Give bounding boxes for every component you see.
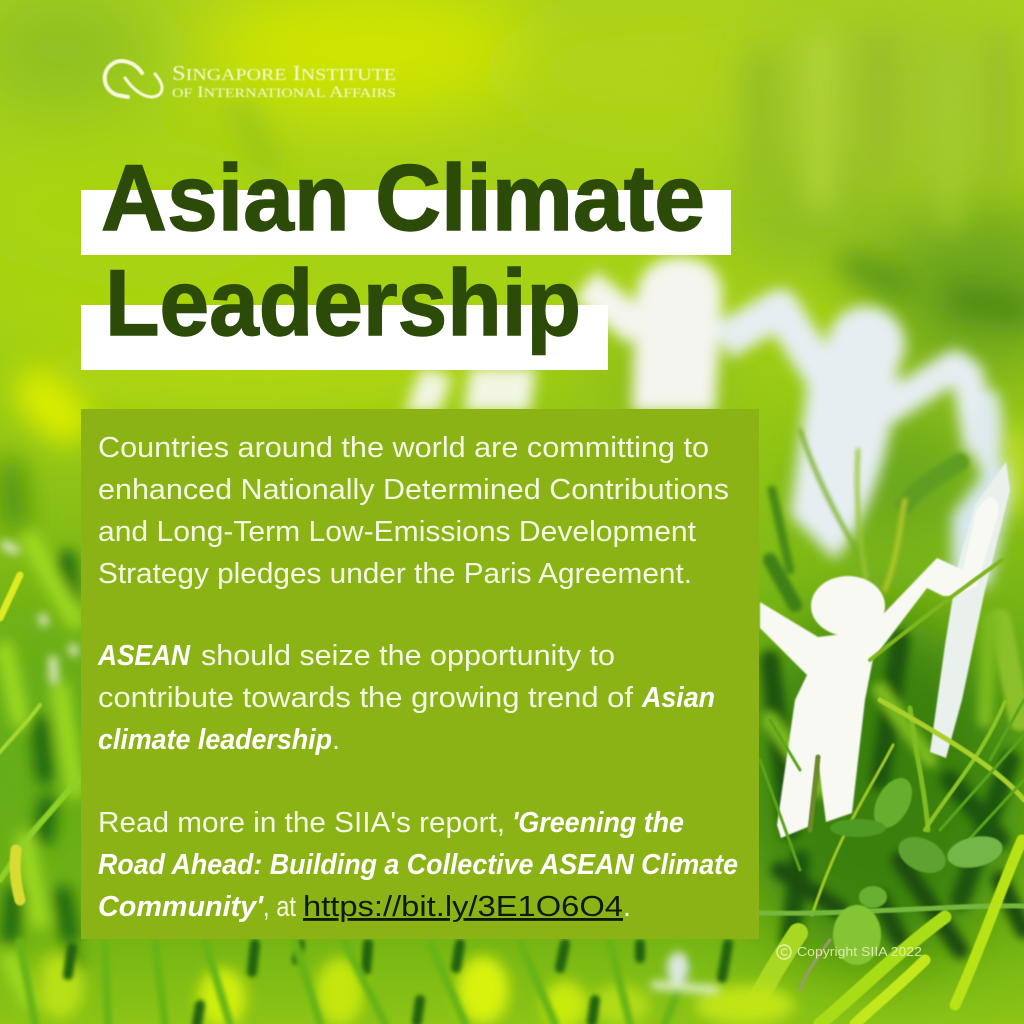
paragraph: read more: . — [623, 891, 631, 923]
paragraph: ASEAN opportunity: should seize the opportunity to — [201, 640, 615, 672]
paragraph: commitments: Strategy pledges under the Paris Agreement. — [98, 558, 692, 590]
paragraph: ASEAN opportunity: ASEAN — [97, 640, 191, 672]
paragraph: read more: Community' — [98, 891, 264, 923]
title highlight bar 2 — [81, 305, 608, 370]
lower right grass: dark under-layer — [770, 620, 1024, 950]
paragraph: ASEAN opportunity — [97, 640, 715, 756]
paragraph: ASEAN opportunity: contribute towards the growing trend of — [98, 682, 633, 714]
paragraph: commitments: enhanced Nationally Determined Contributions — [98, 474, 729, 506]
panel: body text — [81, 409, 759, 939]
paragraph: commitments: Countries around the world are committing to — [98, 432, 709, 464]
logo: Singapore Institute of International Affairs — [105, 61, 396, 101]
figure: far right — [970, 389, 1002, 495]
paragraph: read more: Read more in the SIIA's report, — [98, 807, 505, 839]
grass blades over distant figures — [770, 430, 1020, 720]
clover leaves — [830, 772, 1006, 965]
paper figure: front with raised arms — [760, 497, 998, 838]
title: Asian Climate Leadership — [81, 145, 731, 370]
left column grass — [0, 540, 78, 1000]
figure: right back with raised arms — [722, 306, 980, 560]
paragraph: read more: , at — [263, 891, 296, 923]
copyright notice: Copyright SIIA 2022 — [797, 945, 922, 959]
link: https://bit.ly/3E1O6O4 — [303, 891, 623, 923]
logo wordmark: SINGAPORE INSTITUTE — [172, 61, 396, 85]
icon: logo swirl — [105, 61, 162, 97]
paper figure: rear right — [930, 462, 1010, 758]
paragraph: ASEAN opportunity: climate leadership — [98, 724, 332, 756]
paragraph: commitments — [98, 432, 729, 590]
paragraph: ASEAN opportunity: . — [332, 724, 340, 756]
figure: top centre — [585, 257, 722, 412]
paragraph: ASEAN opportunity: Asian — [641, 682, 715, 714]
background: paper figures in the distance — [404, 257, 1010, 595]
logo wordmark: OF INTERNATIONAL AFFAIRS — [172, 84, 396, 101]
title line 2: Leadership — [105, 250, 581, 355]
paragraph: read more: 'Greening the — [512, 807, 684, 839]
paragraph: read more: Road Ahead: Building a Collective ASEAN Climate — [98, 849, 738, 881]
bottom strip grass — [20, 942, 795, 1024]
title highlight bar 1 — [81, 190, 731, 255]
icon: copyright — [777, 945, 791, 959]
figure: far left — [404, 368, 536, 412]
logo wordmark — [172, 61, 396, 101]
title line 1: Asian Climate — [101, 145, 705, 250]
paragraph: read more — [98, 807, 738, 923]
background: out-of-focus grass streaks — [10, 40, 1020, 520]
foreground grass blades: lower right — [755, 560, 1024, 1024]
paragraph: commitments: and Long-Term Low-Emissions Development — [98, 516, 696, 548]
